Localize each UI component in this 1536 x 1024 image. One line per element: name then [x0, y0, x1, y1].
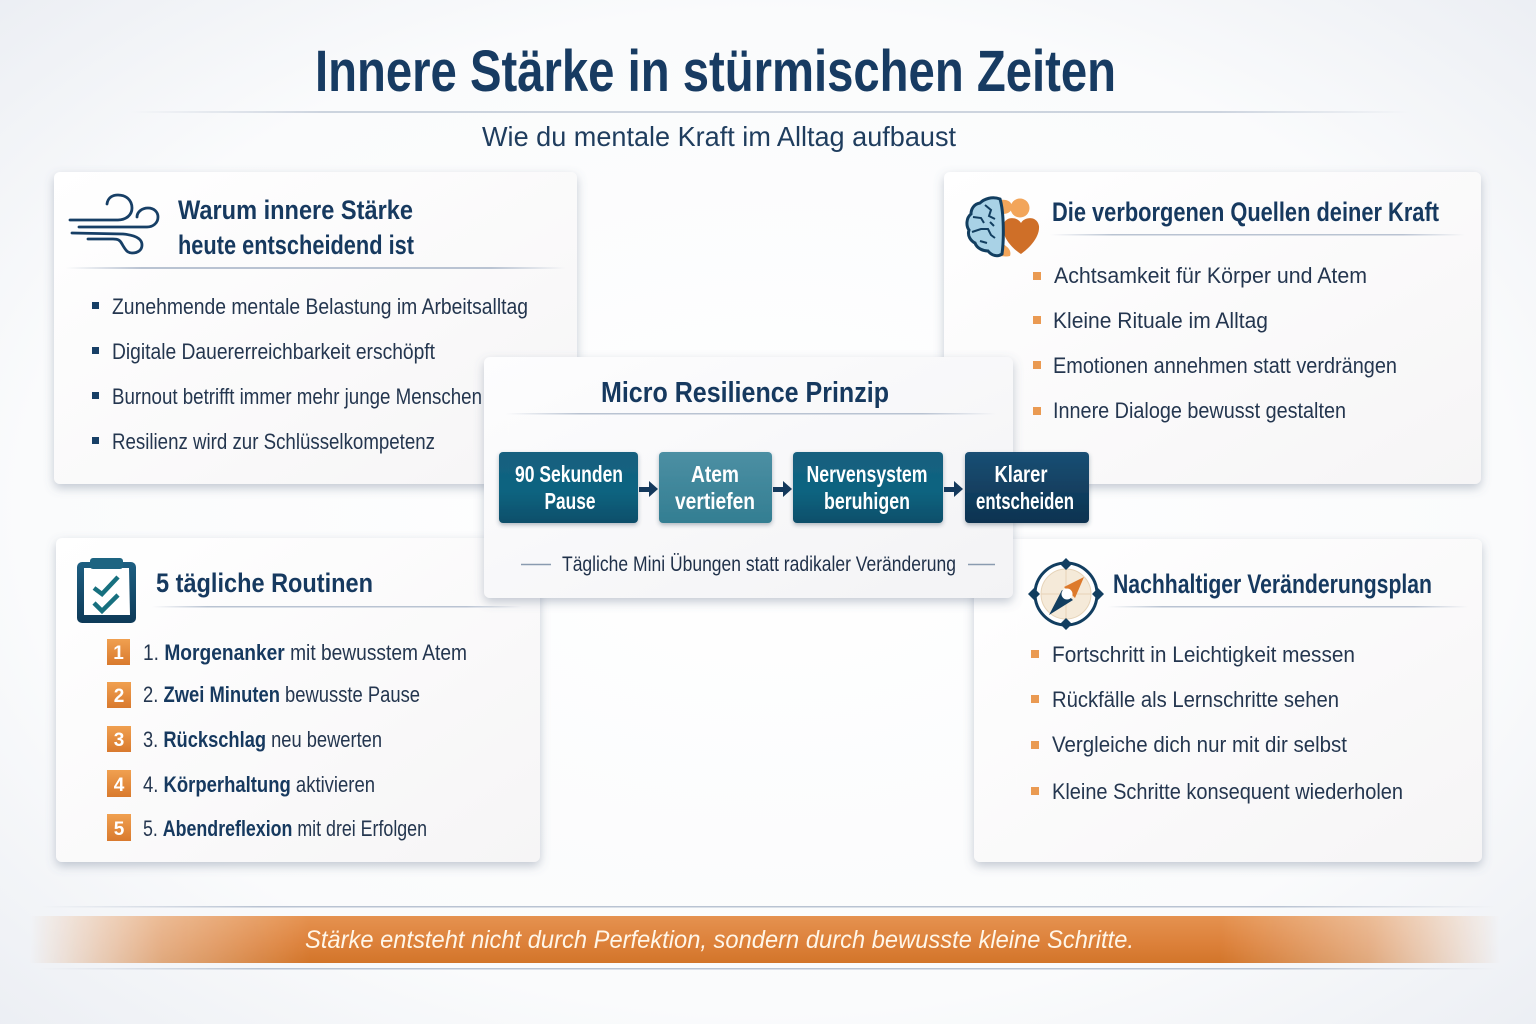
bullet list: Rückfälle als Lernschritte sehen: [1052, 687, 1339, 712]
step: Atem vertiefen: [659, 452, 772, 523]
step: Klarer entscheiden: entscheiden: [976, 488, 1074, 514]
bullet list: Burnout betrifft immer mehr junge Menschen: [112, 384, 482, 409]
heading: [178, 195, 414, 260]
numbered list: 3. Rückschlag neu bewerten: [143, 727, 382, 752]
step: 90 Sekunden Pause: Pause: [544, 488, 596, 514]
numbered list: 2. Zwei Minuten bewusste Pause: [143, 682, 420, 707]
banner: Stärke entsteht nicht durch Perfektion, sondern durch bewusste kleine Schritte.: [305, 926, 1134, 954]
icon: compass: [1028, 558, 1104, 630]
subtitle: Wie du mentale Kraft im Alltag aufbaust: [482, 121, 956, 152]
bullet list: [92, 294, 528, 454]
numbered list: 5: [114, 819, 125, 840]
heading: Nachhaltiger Veränderungsplan: [1113, 569, 1432, 599]
heading: Micro Resilience Prinzip: [601, 377, 889, 409]
step: Klarer entscheiden: [965, 452, 1089, 523]
bullet list: Digitale Dauererreichbarkeit erschöpft: [112, 339, 435, 364]
numbered list: 1. Morgenanker mit bewusstem Atem: [143, 640, 467, 665]
bullet list: Emotionen annehmen statt verdrängen: [1053, 353, 1397, 378]
bullet list: [1033, 263, 1397, 423]
step: 90 Sekunden Pause: [499, 452, 638, 523]
heading: heute entscheidend ist: [178, 230, 414, 260]
step: Klarer entscheiden: Klarer: [994, 461, 1048, 487]
arrow: [639, 481, 658, 497]
bullet list: Achtsamkeit für Körper und Atem: [1054, 263, 1367, 288]
step: Nervensystem beruhigen: [793, 452, 943, 523]
numbered list: 4: [114, 775, 125, 796]
step: Nervensystem beruhigen: beruhigen: [824, 488, 910, 514]
heading: Die verborgenen Quellen deiner Kraft: [1052, 197, 1439, 227]
banner: [30, 916, 1500, 963]
panel: 5 tägliche Routinen: [56, 538, 540, 862]
step: 90 Sekunden Pause: 90 Sekunden: [515, 461, 623, 487]
icon: wind: [70, 195, 158, 253]
heading: Warum innere Stärke: [178, 195, 413, 225]
caption: Tägliche Mini Übungen statt radikaler Veränderung: [562, 553, 956, 576]
numbered list: 2: [114, 686, 124, 707]
bullet list: Resilienz wird zur Schlüsselkompetenz: [112, 429, 435, 454]
numbered list: 3: [114, 730, 124, 751]
bullet list: Innere Dialoge bewusst gestalten: [1053, 398, 1346, 423]
bullet list: [1031, 642, 1403, 804]
panel: Veränderungsplan: [974, 539, 1482, 862]
title: Innere Stärke in stürmischen Zeiten: [315, 39, 1116, 104]
icon: brain and heart: [967, 198, 1039, 256]
arrow: [773, 481, 792, 497]
bullet list: Zunehmende mentale Belastung im Arbeitsalltag: [112, 294, 528, 319]
step: Atem vertiefen: vertiefen: [675, 488, 755, 514]
panel: verborgene Quellen: [944, 172, 1481, 484]
step: Nervensystem beruhigen: Nervensystem: [806, 461, 928, 487]
panel: warum innere Stärke: [54, 172, 577, 484]
bullet list: Fortschritt in Leichtigkeit messen: [1052, 642, 1355, 667]
bullet list: Kleine Schritte konsequent wiederholen: [1052, 779, 1403, 804]
bullet list: Kleine Rituale im Alltag: [1053, 308, 1268, 333]
numbered list: 5. Abendreflexion mit drei Erfolgen: [143, 816, 427, 841]
icon: clipboard checklist: [77, 558, 136, 623]
panel: Micro Resilience Prinzip: [484, 357, 1089, 598]
numbered list: 1: [113, 643, 124, 664]
bullet list: Vergleiche dich nur mit dir selbst: [1052, 732, 1347, 757]
numbered list: [107, 639, 467, 841]
arrow: [944, 481, 963, 497]
numbered list: 4. Körperhaltung aktivieren: [143, 772, 375, 797]
step: Atem vertiefen: Atem: [691, 461, 739, 487]
heading: 5 tägliche Routinen: [156, 568, 373, 598]
